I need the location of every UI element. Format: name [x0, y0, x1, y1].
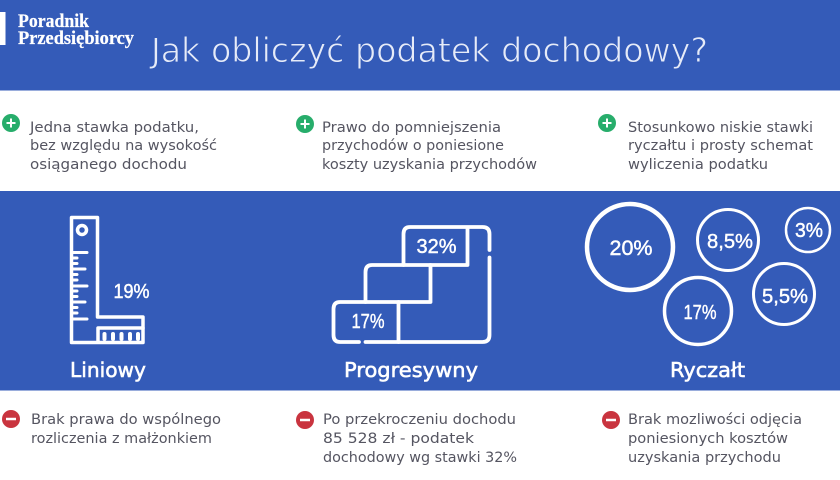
- text: progresywny disadvantage: dochodowy wg stawki 32%: [323, 450, 517, 466]
- icon: minus: [2, 410, 20, 428]
- logo: Przedsiębiorcy: [18, 29, 135, 49]
- text: progresywny disadvantage: Po przekroczeniu dochodu: [323, 412, 516, 428]
- panel: tax forms: [0, 191, 840, 390]
- icon: plus: [296, 115, 314, 133]
- label: Liniowy: Liniowy: [70, 358, 146, 382]
- text: ryczałt disadvantage: Brak mozliwości odjęcia: [628, 412, 802, 428]
- text: progresywny advantage: [322, 120, 537, 173]
- icon: plus: [2, 114, 20, 132]
- icon: minus: [296, 411, 314, 429]
- text: liniowy disadvantage: [31, 412, 221, 447]
- text: ryczałt advantage: [628, 120, 813, 173]
- text: progresywny advantage: Prawo do pomniejszenia: [322, 120, 501, 136]
- text: progresywny advantage: koszty uzyskania przychodów: [322, 157, 537, 173]
- text: liniowy advantage: bez względu na wysokość: [30, 138, 217, 154]
- disadvantage: progresywny: [296, 411, 517, 466]
- text: liniowy disadvantage: rozliczenia z małżonkiem: [31, 431, 212, 447]
- title: Jak obliczyć podatek dochodowy?: [149, 31, 708, 71]
- text: progresywny disadvantage: 85 528 zł - podatek: [323, 431, 475, 447]
- column: liniowy: [70, 218, 150, 382]
- text: progresywny advantage: przychodów o poniesione: [322, 138, 504, 154]
- icon: minus: [602, 411, 620, 429]
- label: Ryczałt: Ryczałt: [670, 358, 745, 382]
- label: Progresywny: Progresywny: [344, 358, 478, 382]
- icon: plus: [598, 114, 616, 132]
- text: liniowy advantage: osiąganego dochodu: [30, 157, 187, 173]
- advantage: liniowy: [2, 114, 217, 173]
- bubble: 5,5%: 5,5%: [762, 285, 808, 308]
- bubble: 20%: [587, 204, 673, 290]
- text: ryczałt advantage: Stosunkowo niskie stawki: [628, 120, 813, 136]
- panel: advantages: [2, 114, 813, 173]
- bubble: 3%: [786, 208, 830, 252]
- text: ryczałt disadvantage: [628, 412, 802, 466]
- advantage: ryczałt: [598, 114, 813, 173]
- text: progresywny disadvantage: [323, 412, 517, 466]
- disadvantage: ryczałt: [602, 411, 802, 466]
- text: ryczałt advantage: ryczałtu i prosty schemat: [628, 138, 813, 154]
- bubble: 20%: 20%: [610, 237, 652, 260]
- panel: disadvantages: [2, 410, 802, 466]
- text: liniowy disadvantage: Brak prawa do wspólnego: [31, 412, 221, 428]
- bubble: 5,5%: [754, 264, 814, 324]
- logo: Poradnik: [18, 12, 90, 32]
- advantage: progresywny: [296, 115, 537, 173]
- rate: 19%: 19%: [114, 281, 150, 303]
- text: liniowy advantage: Jedna stawka podatku,: [29, 120, 199, 136]
- bubble: 3%: 3%: [795, 220, 823, 242]
- bubble: 17%: [664, 278, 732, 344]
- text: ryczałt disadvantage: uzyskania przychodu: [628, 450, 781, 466]
- text: ryczałt disadvantage: poniesionych kosztów: [628, 431, 788, 447]
- rate: 32%: 32%: [416, 236, 457, 258]
- column: progresywny: [334, 227, 490, 382]
- logo: [0, 12, 135, 49]
- bubble: 17%: 17%: [684, 301, 716, 324]
- icon: ruler square: [72, 218, 143, 342]
- header panel: [0, 0, 840, 90]
- icon: stairs: [334, 227, 490, 342]
- text: ryczałt advantage: wyliczenia podatku: [628, 157, 768, 173]
- disadvantage: liniowy: [2, 410, 221, 447]
- bubble: 8,5%: [698, 210, 758, 270]
- column: ryczałt: [587, 204, 830, 382]
- bubble: 8,5%: 8,5%: [707, 230, 753, 253]
- text: liniowy advantage: [29, 120, 217, 173]
- rate: 17%: 17%: [352, 311, 385, 333]
